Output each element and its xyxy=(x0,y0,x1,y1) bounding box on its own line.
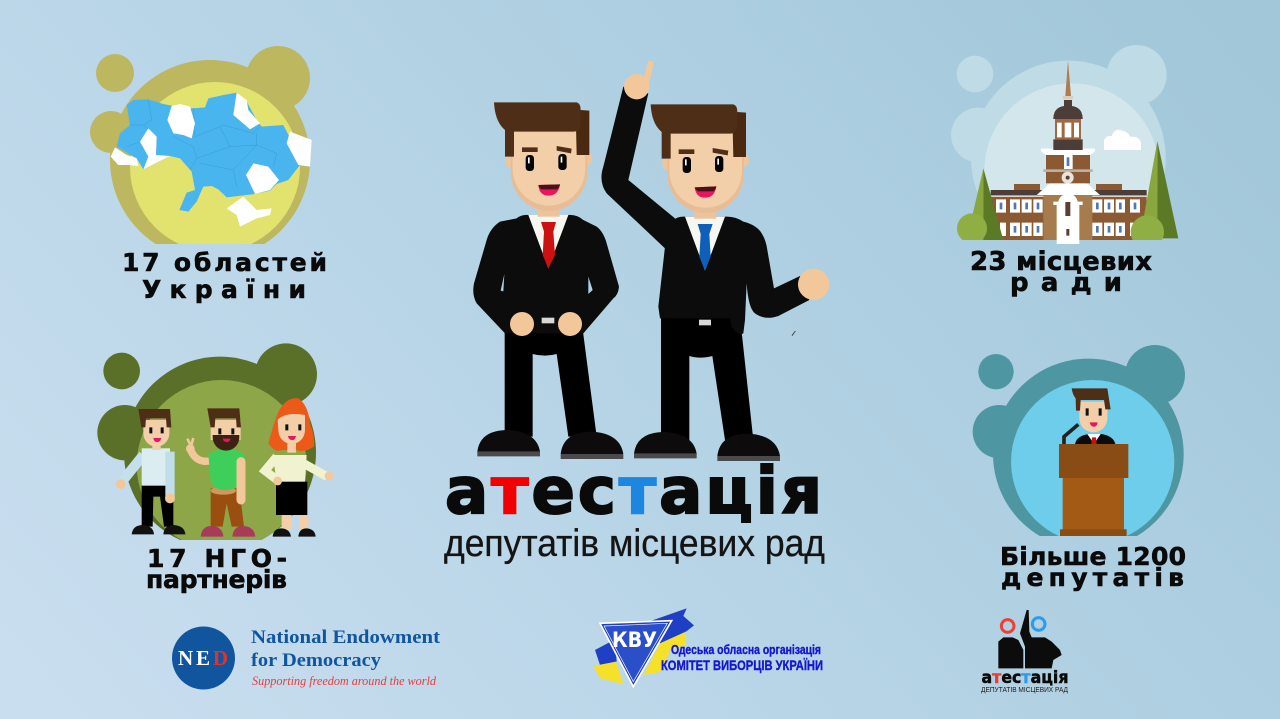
bearded man in green xyxy=(186,408,255,537)
speaker at podium xyxy=(1059,388,1128,536)
label: 17 NGO xyxy=(146,544,287,594)
left deputy xyxy=(473,102,623,459)
NED wordmark xyxy=(251,627,441,688)
NED wordmark: National Endowment xyxy=(251,627,441,648)
hands xyxy=(624,61,829,300)
KVU text: Одеська обласна організація xyxy=(671,642,821,657)
building illustration xyxy=(957,61,1178,249)
label: 17 regions: України xyxy=(142,275,306,304)
right deputy xyxy=(601,61,829,461)
main building xyxy=(991,182,1147,244)
collar and tie xyxy=(685,217,725,271)
logo: atestatsiia small xyxy=(981,610,1068,694)
trees xyxy=(957,141,1178,249)
raised arm xyxy=(601,87,675,248)
circles backdrop: deputies xyxy=(973,345,1185,549)
shoes xyxy=(634,432,780,456)
podium xyxy=(1059,444,1128,536)
label: 23 councils: ради xyxy=(1010,268,1122,298)
people illustration xyxy=(116,398,333,537)
collar and tie xyxy=(528,215,568,268)
man in white shirt xyxy=(116,409,185,534)
head xyxy=(538,205,560,217)
speaker xyxy=(1072,388,1115,444)
map of Ukraine xyxy=(111,93,312,227)
NED wordmark: for Democracy xyxy=(251,650,382,671)
logo: Committee of Voters of Ukraine xyxy=(593,608,823,687)
panel: 17 regions of Ukraine xyxy=(90,46,327,304)
label: 17 NGO: 17 НГО- xyxy=(147,544,287,573)
shoes xyxy=(477,430,623,454)
trousers xyxy=(505,327,597,437)
jacket xyxy=(658,217,809,334)
label: 23 councils: 23 місцевих xyxy=(970,247,1152,277)
panel: 17 NGO partners xyxy=(97,343,333,594)
silhouettes with rings xyxy=(998,610,1062,668)
label: 17 regions xyxy=(122,248,327,304)
panel: more than 1200 deputies xyxy=(973,345,1186,592)
head xyxy=(694,207,716,219)
hands xyxy=(510,312,534,336)
label: 1200 deputies xyxy=(1000,542,1186,592)
circles backdrop: partners xyxy=(97,343,317,550)
cloud xyxy=(1104,130,1141,150)
tower xyxy=(1041,61,1095,184)
logo: National Endowment for Democracy xyxy=(172,626,441,690)
NED badge: NED xyxy=(178,646,228,670)
trousers xyxy=(661,317,753,440)
KVU flag and triangle xyxy=(593,608,694,687)
panel: 23 local councils xyxy=(951,45,1178,298)
label: 1200 deputies: Більше 1200 xyxy=(1000,542,1186,571)
KVU text xyxy=(661,642,823,673)
circles backdrop: councils xyxy=(951,45,1166,201)
KVU letters: КВУ xyxy=(612,628,657,652)
small logo wordmark: ДЕПУТАТІВ МІСЦЕВИХ РАД xyxy=(981,685,1068,694)
title: atestatsiia: атестація xyxy=(445,455,822,529)
small logo wordmark: атестація xyxy=(982,668,1068,688)
KVU text: КОМІТЕТ ВИБОРЦІВ УКРАЇНИ xyxy=(661,657,823,673)
microphone xyxy=(1064,424,1078,444)
jacket xyxy=(473,215,619,333)
subtitle: депутатів місцевих рад xyxy=(444,523,825,565)
NED wordmark: Supporting freedom around the world xyxy=(252,674,437,688)
woman with red hair xyxy=(265,398,333,537)
circles backdrop: regions xyxy=(90,46,310,260)
label: 1200 deputies: депутатів xyxy=(1001,563,1184,592)
central illustration: two deputies xyxy=(473,61,829,461)
NED badge xyxy=(172,626,235,690)
label: 17 regions: 17 областей xyxy=(122,248,327,277)
label: 17 NGO: партнерів xyxy=(146,565,287,594)
label: 23 councils xyxy=(970,247,1152,298)
